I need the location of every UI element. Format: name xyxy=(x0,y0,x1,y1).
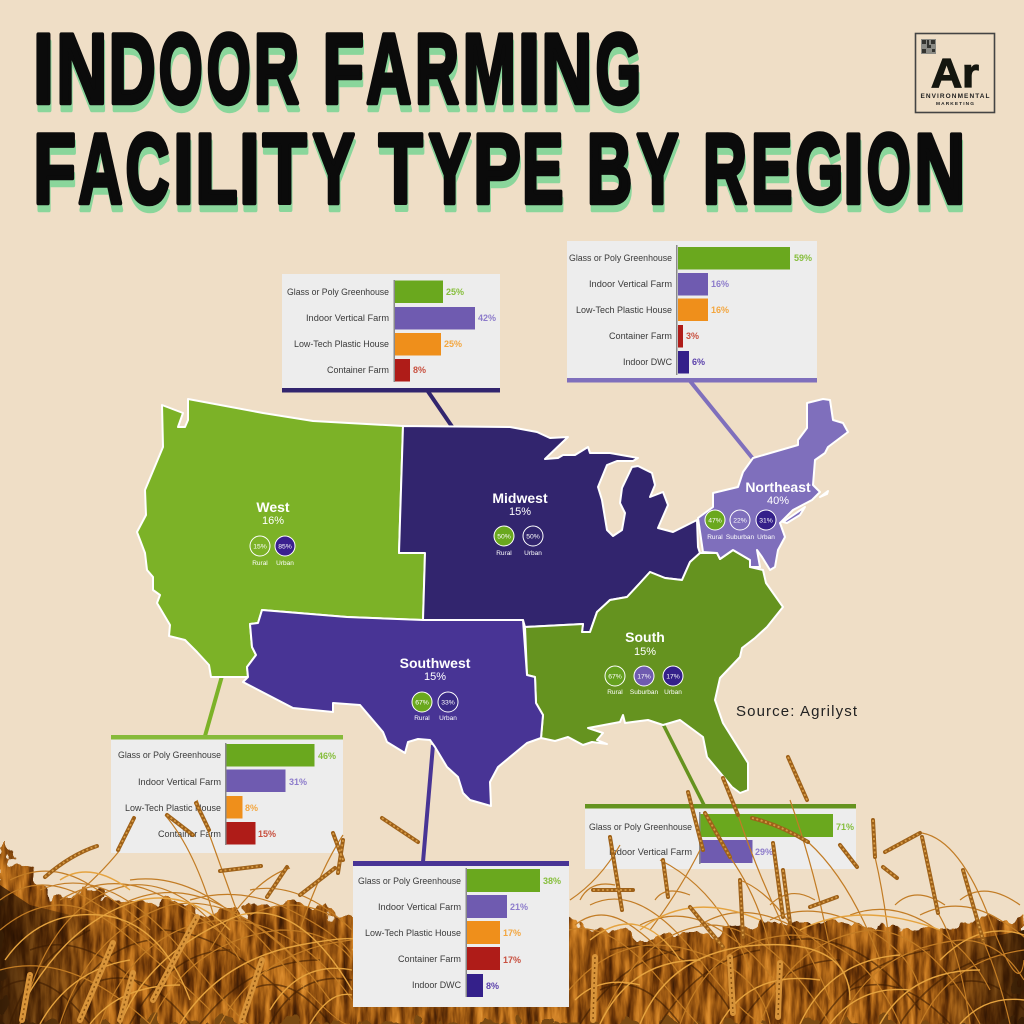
logo: Ar Environmental Marketing: ENVIRONMENTAL xyxy=(920,93,990,100)
panel: northeast chart: 59% xyxy=(794,253,812,263)
map: southwest region xyxy=(243,610,543,806)
title: N xyxy=(56,14,107,125)
region label: midwest: Midwest xyxy=(492,490,548,506)
panel: northeast chart: Low-Tech Plastic House xyxy=(576,305,672,315)
panel: midwest chart: 8% xyxy=(413,365,426,375)
title: F xyxy=(33,114,76,225)
source note: Source: Agrilyst xyxy=(736,703,858,720)
region label: midwest: Rural xyxy=(496,550,512,557)
panel: west chart: Indoor Vertical Farm xyxy=(138,777,221,787)
region label: southwest: 67% xyxy=(415,700,429,706)
connector: south xyxy=(663,724,704,805)
region label: northeast: 31% xyxy=(759,518,773,524)
title: Y xyxy=(429,113,471,224)
title: I xyxy=(843,113,864,224)
region label: west: Urban xyxy=(276,560,294,567)
title: D xyxy=(109,13,156,124)
panel: southwest chart: Container Farm xyxy=(398,954,461,964)
panel: midwest chart: Container Farm xyxy=(327,365,389,375)
panel: west chart: 46% xyxy=(318,751,336,761)
region label: northeast xyxy=(705,479,811,541)
title: O xyxy=(207,14,251,125)
title: E xyxy=(522,113,563,224)
panel: south chart: Indoor Vertical Farm xyxy=(609,847,692,857)
connector: southwest xyxy=(423,745,433,862)
map: northeast region xyxy=(698,399,848,570)
region label: west: Rural xyxy=(252,560,268,567)
title: B xyxy=(587,113,632,224)
title: T xyxy=(379,113,423,225)
panel: southwest chart: 17% xyxy=(503,928,521,938)
region label: northeast: 40% xyxy=(767,495,789,507)
panel: west chart: Container Farm xyxy=(158,829,221,839)
title: I xyxy=(33,13,54,124)
title: P xyxy=(473,114,521,225)
region label: southwest xyxy=(400,655,471,722)
region label: midwest xyxy=(492,490,548,557)
region label: west: West xyxy=(256,499,290,515)
wheat field photo xyxy=(0,757,1024,1024)
panel: south chart: 29% xyxy=(755,847,773,857)
title: R xyxy=(703,114,747,225)
connector: midwest xyxy=(427,390,453,428)
title: L xyxy=(196,114,238,225)
region label: south: Rural xyxy=(607,689,623,696)
title: A xyxy=(366,13,411,124)
region label: midwest: 50% xyxy=(526,534,540,540)
region label: northeast: 22% xyxy=(733,518,747,524)
title: N xyxy=(914,114,965,225)
region label: midwest: 50% xyxy=(497,534,511,540)
region label: northeast: Suburban xyxy=(726,534,754,541)
region label: northeast: Northeast xyxy=(745,479,811,495)
logo: Ar Environmental Marketing: MARKETING xyxy=(936,101,974,107)
title: R xyxy=(254,13,299,124)
panel: midwest chart: Glass or Poly Greenhouse xyxy=(287,287,389,297)
region label: south xyxy=(605,629,683,696)
panel: southwest chart: Indoor Vertical Farm xyxy=(378,902,461,912)
region label: south: 17% xyxy=(666,674,680,680)
panel: midwest chart: Indoor Vertical Farm xyxy=(306,313,389,323)
panel: midwest chart: 42% xyxy=(478,313,496,323)
title xyxy=(33,12,965,225)
region label: south: South xyxy=(625,629,665,645)
panel: southwest chart: Glass or Poly Greenhouse xyxy=(358,876,461,886)
panel: northeast chart: Container Farm xyxy=(609,331,672,341)
panel: west chart: Low-Tech Plastic House xyxy=(125,803,221,813)
panel: west chart: Glass or Poly Greenhouse xyxy=(118,750,221,760)
logo: Ar Environmental Marketing: Ar xyxy=(931,50,979,96)
title: A xyxy=(78,112,122,224)
region label: west: 15% xyxy=(253,544,267,550)
connector: northeast xyxy=(690,381,754,460)
panel: west chart: 15% xyxy=(258,829,276,839)
panel: northeast chart xyxy=(567,241,817,382)
region label: southwest: 33% xyxy=(441,700,455,706)
title: Y xyxy=(637,113,679,224)
panel: southwest chart: 17% xyxy=(503,955,521,965)
region label: west: 85% xyxy=(278,544,292,550)
panel: southwest chart: Indoor DWC xyxy=(412,980,461,990)
title: O xyxy=(159,14,203,125)
region label: southwest: 15% xyxy=(424,671,446,683)
panel: southwest chart: 21% xyxy=(510,902,528,912)
panel: midwest chart xyxy=(282,274,500,392)
logo: Ar Environmental Marketing xyxy=(916,34,994,112)
map: south region xyxy=(525,550,783,793)
panel: south chart xyxy=(585,804,856,869)
panel: southwest chart: 38% xyxy=(543,876,561,886)
panel: northeast chart: 16% xyxy=(711,279,729,289)
panel: south chart: 71% xyxy=(836,822,854,832)
panel: northeast chart: Indoor Vertical Farm xyxy=(589,279,672,289)
region label: south: Suburban xyxy=(630,689,658,696)
title: R xyxy=(415,14,459,125)
title: N xyxy=(541,14,592,125)
region label: southwest: Urban xyxy=(439,715,457,722)
region label: midwest: 15% xyxy=(509,506,531,518)
region label: northeast: Urban xyxy=(757,534,775,541)
region label: south: Urban xyxy=(664,689,682,696)
region label: southwest: Southwest xyxy=(400,655,471,671)
region label: south: 17% xyxy=(637,674,651,680)
map: west region xyxy=(137,399,425,677)
region label: south: 67% xyxy=(608,674,622,680)
title: M xyxy=(463,12,516,124)
title: I xyxy=(518,14,540,125)
title: I xyxy=(239,113,260,224)
title: O xyxy=(867,114,911,225)
region label: northeast: 47% xyxy=(708,518,722,524)
panel: southwest chart xyxy=(353,861,569,1007)
panel: west chart: 8% xyxy=(245,803,258,813)
region label: northeast: Rural xyxy=(707,534,723,541)
panel: southwest chart: Low-Tech Plastic House xyxy=(365,928,461,938)
panel: northeast chart: 3% xyxy=(686,331,699,341)
panel: west chart xyxy=(111,735,343,853)
title: F xyxy=(323,14,364,125)
connector: west xyxy=(205,676,222,736)
title: T xyxy=(263,113,307,225)
panel: midwest chart: 25% xyxy=(444,339,462,349)
title: G xyxy=(596,14,641,125)
region label: southwest: Rural xyxy=(414,715,430,722)
panel: northeast chart: Glass or Poly Greenhouse xyxy=(569,253,672,263)
region label: midwest: Urban xyxy=(524,550,542,557)
title: Y xyxy=(313,113,355,224)
panel: southwest chart: 8% xyxy=(486,981,499,991)
region label: west xyxy=(250,499,295,567)
region label: west: 16% xyxy=(262,515,284,527)
title: G xyxy=(796,113,843,224)
panel: northeast chart: 16% xyxy=(711,305,729,315)
panel: south chart: Glass or Poly Greenhouse xyxy=(589,822,692,832)
panel: midwest chart: Low-Tech Plastic House xyxy=(294,339,389,349)
panel: northeast chart: 6% xyxy=(692,357,705,367)
title: E xyxy=(751,113,792,224)
title: I xyxy=(173,113,194,224)
map: midwest region xyxy=(399,426,700,632)
region label: south: 15% xyxy=(634,646,656,658)
title: C xyxy=(126,114,169,225)
panel: west chart: 31% xyxy=(289,777,307,787)
panel: northeast chart: Indoor DWC xyxy=(623,357,672,367)
panel: midwest chart: 25% xyxy=(446,287,464,297)
